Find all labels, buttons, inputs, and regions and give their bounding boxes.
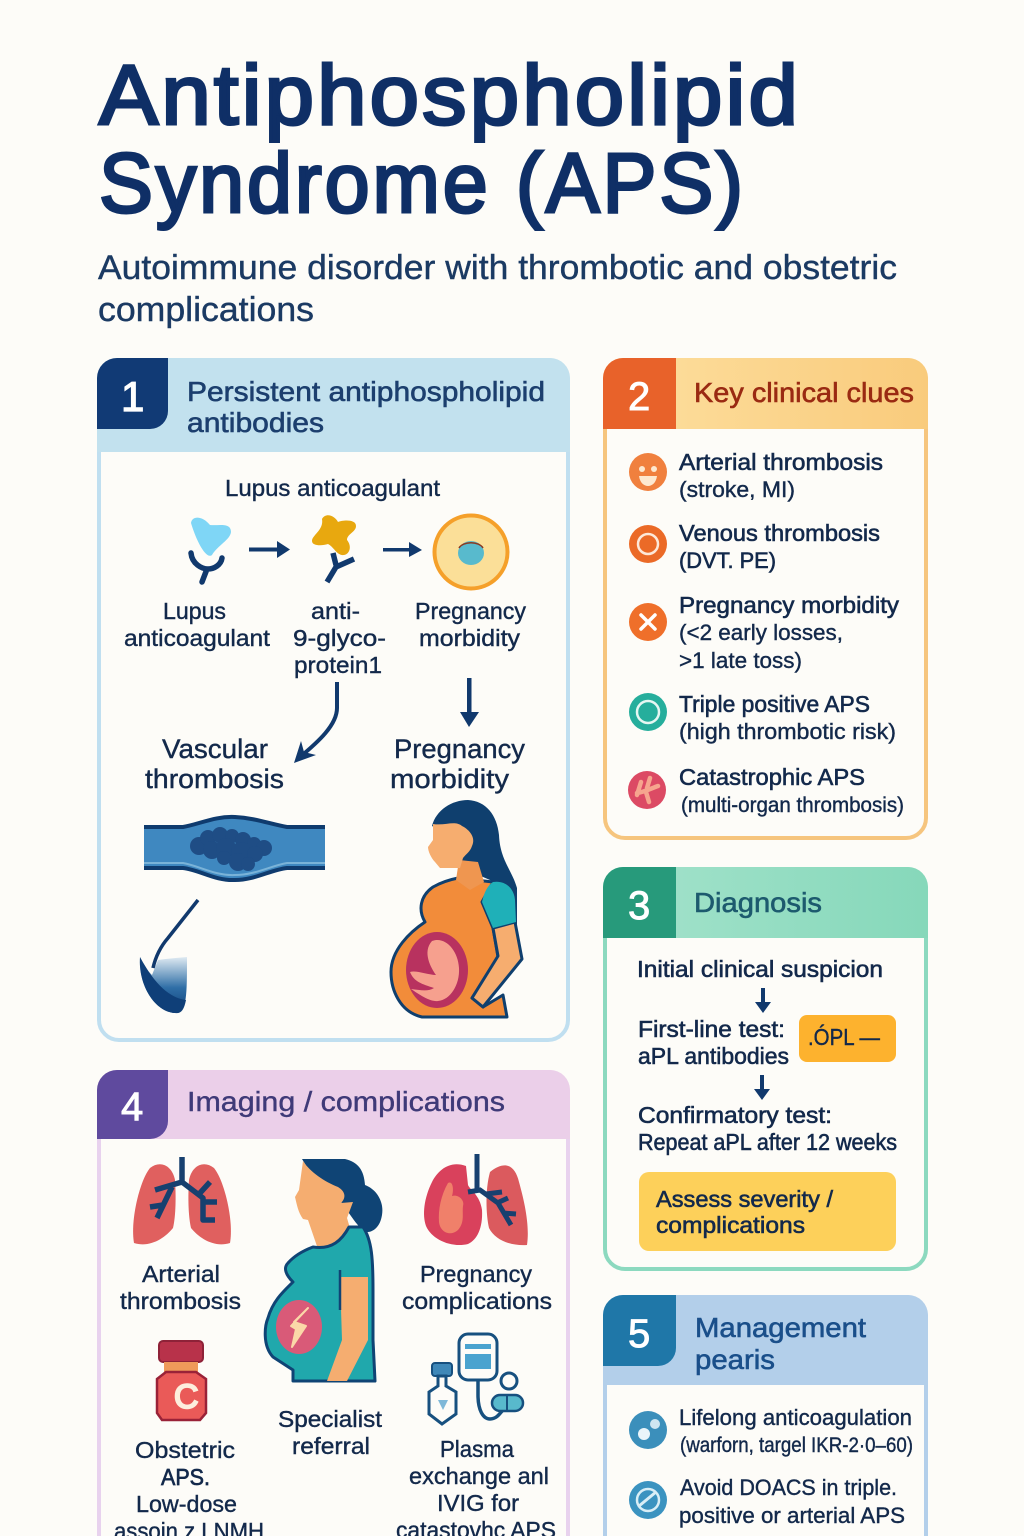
panel 2 header bbox=[603, 358, 928, 429]
labels: arterial thrombosis: thrombosis bbox=[120, 1288, 241, 1314]
labels: outcomes: thrombosis bbox=[145, 764, 284, 794]
title: Antiphospholipid bbox=[99, 48, 801, 142]
labels: outcomes: Pregnancy bbox=[394, 734, 525, 764]
panel 3: diagnosis bbox=[603, 867, 928, 1269]
clue: arterial thrombosis bbox=[629, 449, 883, 502]
clue: pregnancy morbidity: (<2 early losses, bbox=[679, 620, 843, 645]
panel 5 header: 5 bbox=[628, 1312, 650, 1356]
subtitle: Autoimmune disorder with thrombotic and obstetric bbox=[98, 249, 897, 287]
icon: blood vessel with clot bbox=[144, 816, 325, 881]
labels: pathway: morbidity bbox=[419, 625, 521, 651]
clue: arterial thrombosis: Arterial thrombosis bbox=[679, 449, 883, 475]
step: first-line test: First-line test: bbox=[638, 1016, 785, 1042]
icon: pregnant woman with fetus bbox=[391, 800, 522, 1017]
icon: lungs with heart bbox=[424, 1154, 528, 1245]
panel 2 header: 2 bbox=[628, 375, 650, 419]
arrow bbox=[755, 988, 771, 1013]
labels: outcomes: morbidity bbox=[390, 764, 510, 794]
labels: plasma exchange: Plasma bbox=[440, 1436, 514, 1462]
labels: plasma exchange bbox=[396, 1436, 556, 1536]
pearl: avoid DOACs: positive or arterial APS bbox=[679, 1503, 905, 1528]
panel 2: key clinical clues bbox=[603, 358, 928, 838]
arrow: curve to vascular thrombosis bbox=[294, 682, 337, 763]
step: confirmatory test: Confirmatory test: bbox=[638, 1102, 832, 1128]
labels: obstetric APS: Obstetric bbox=[135, 1437, 235, 1463]
panel 1: persistent antiphospholipid antibodies bbox=[97, 358, 570, 1040]
pearl: avoid DOACs bbox=[629, 1475, 905, 1528]
labels: pathway: Pregnancy bbox=[415, 598, 526, 624]
badge: aPL: .ÓPL — bbox=[808, 1024, 880, 1050]
clue: pregnancy morbidity: >1 late toss) bbox=[679, 648, 802, 673]
title: Syndrome (APS) bbox=[99, 136, 746, 230]
labels: outcomes bbox=[145, 734, 525, 794]
arrow bbox=[249, 541, 290, 558]
panel 3 header: 3 bbox=[628, 884, 650, 928]
labels: pathway: 9-glyco- bbox=[293, 625, 386, 651]
icon: lungs bbox=[133, 1157, 231, 1244]
clue: pregnancy morbidity bbox=[629, 592, 900, 673]
clue: triple positive APS: Triple positive APS bbox=[679, 691, 870, 717]
icon: pregnant woman profile bbox=[265, 1159, 382, 1381]
icon: anti-beta-2 glycoprotein bbox=[312, 515, 356, 582]
arrow bbox=[383, 542, 422, 557]
icon: pregnancy morbidity cell bbox=[434, 516, 508, 588]
clue: triple positive APS: (high thrombotic risk) bbox=[679, 719, 896, 744]
icon: blood drop with line bbox=[140, 900, 198, 1013]
panel 3 header: Diagnosis bbox=[694, 887, 822, 918]
callout: assess severity: Assess severity / bbox=[656, 1186, 834, 1212]
text: lupus anticoagulant heading: Lupus anticoagulant bbox=[225, 475, 441, 501]
step: first-line test: aPL antibodies bbox=[638, 1043, 789, 1069]
panel 5: management pearls bbox=[603, 1295, 928, 1536]
panel 5 header: pearis bbox=[695, 1344, 775, 1375]
clue: triple positive APS bbox=[629, 691, 896, 744]
step: confirmatory test: Repeat aPL after 12 weeks bbox=[638, 1129, 897, 1155]
labels: pathway: anticoagulant bbox=[124, 625, 271, 651]
labels: arterial thrombosis bbox=[120, 1261, 241, 1314]
clue: arterial thrombosis: (stroke, MI) bbox=[679, 477, 795, 502]
icon: lupus antibody bbox=[191, 518, 231, 582]
clue: catastrophic APS: Catastrophic APS bbox=[679, 764, 865, 790]
badge: aPL bbox=[799, 1015, 896, 1062]
panel 3 header bbox=[603, 867, 928, 938]
labels: obstetric APS: APS. bbox=[161, 1464, 210, 1490]
arrow: down to pregnancy morbidity bbox=[460, 678, 479, 727]
clue: catastrophic APS bbox=[628, 764, 904, 817]
labels: pathway: anti- bbox=[311, 598, 360, 624]
panel 1 header: 1 bbox=[121, 373, 144, 420]
callout: assess severity bbox=[639, 1172, 896, 1251]
panel 1 header bbox=[97, 358, 570, 452]
labels: specialist referral: referral bbox=[292, 1433, 370, 1459]
icon: plasma exchange equipment bbox=[429, 1334, 523, 1424]
labels: plasma exchange: exchange anl bbox=[409, 1463, 549, 1489]
step: initial clinical suspicion: Initial clinical suspicion bbox=[637, 956, 883, 982]
panel 5 header bbox=[603, 1295, 928, 1385]
step: confirmatory test bbox=[638, 1102, 897, 1155]
panel 2 header: Key clinical clues bbox=[694, 377, 914, 408]
labels: outcomes: Vascular bbox=[162, 734, 268, 764]
labels: arterial thrombosis: Arterial bbox=[142, 1261, 220, 1287]
callout: assess severity: complications bbox=[656, 1212, 805, 1238]
title bbox=[99, 48, 801, 230]
labels: pathway bbox=[124, 598, 526, 678]
arrow bbox=[754, 1075, 770, 1100]
pearl: avoid DOACs: Avoid DOACS in triple. bbox=[680, 1475, 897, 1500]
panel 4 header: Imaging / complications bbox=[187, 1086, 505, 1117]
labels: pregnancy complications bbox=[402, 1261, 552, 1314]
icon: medication bottle: C bbox=[174, 1378, 199, 1416]
labels: pregnancy complications: complications bbox=[402, 1288, 552, 1314]
labels: pathway: protein1 bbox=[294, 652, 382, 678]
panel 1 header: Persistent antiphospholipid bbox=[187, 376, 545, 407]
labels: obstetric APS: Low-dose bbox=[136, 1491, 237, 1517]
labels: plasma exchange: IVIG for bbox=[437, 1490, 519, 1516]
panel 4: imaging / complications bbox=[97, 1070, 570, 1536]
labels: specialist referral bbox=[278, 1406, 383, 1459]
labels: pathway: Lupus bbox=[163, 598, 226, 624]
step: first-line test bbox=[638, 1016, 789, 1069]
panel 5 header: Management bbox=[695, 1312, 866, 1343]
labels: obstetric APS bbox=[114, 1437, 264, 1536]
pearl: lifelong anticoagulation bbox=[629, 1405, 913, 1457]
pearl: lifelong anticoagulation: Lifelong anticoagulation bbox=[679, 1405, 912, 1430]
clue: venous thrombosis: Venous thrombosis bbox=[679, 520, 880, 546]
subtitle bbox=[98, 249, 897, 329]
clue: venous thrombosis: (DVT. PE) bbox=[679, 548, 776, 573]
panel 4 header bbox=[97, 1070, 570, 1139]
panel 1 header: antibodies bbox=[187, 407, 324, 438]
panel 4 header: 4 bbox=[121, 1085, 143, 1129]
labels: specialist referral: Specialist bbox=[278, 1406, 383, 1432]
clue: pregnancy morbidity: Pregnancy morbidity bbox=[679, 592, 900, 618]
clue: venous thrombosis bbox=[629, 520, 880, 573]
labels: pregnancy complications: Pregnancy bbox=[420, 1261, 532, 1287]
pearl: lifelong anticoagulation: (warforn, targel IKR-2·0–60) bbox=[680, 1434, 913, 1457]
icon: medication bottle bbox=[157, 1341, 206, 1420]
clue: catastrophic APS: (multi-organ thrombosis) bbox=[681, 794, 904, 817]
subtitle: complications bbox=[98, 291, 314, 329]
